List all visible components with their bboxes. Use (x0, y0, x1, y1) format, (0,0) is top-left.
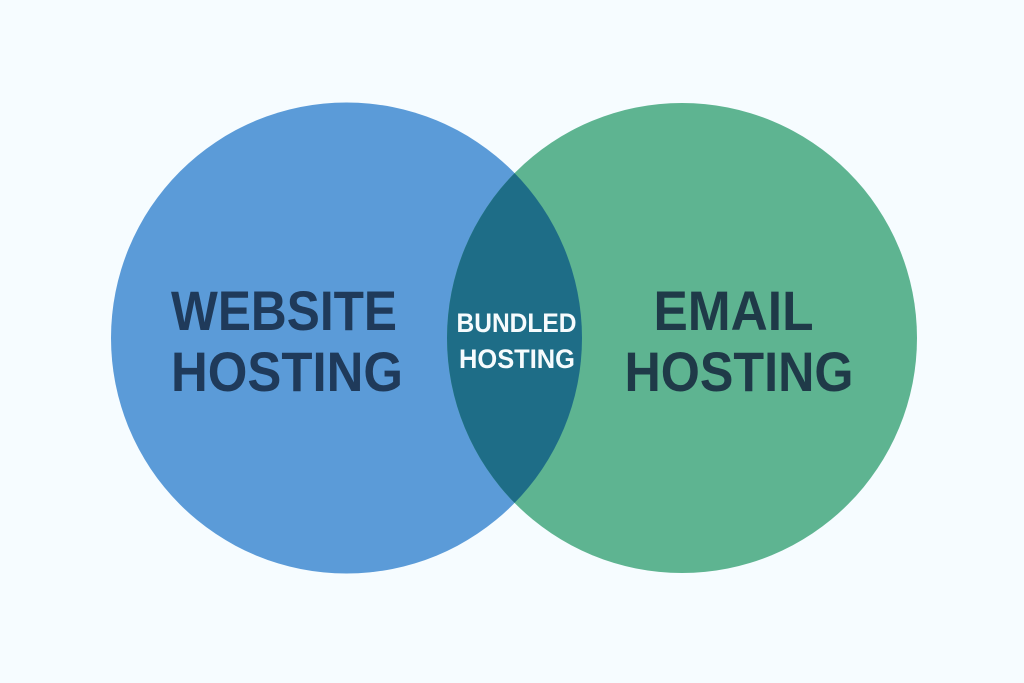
label: bundled hosting: HOSTING (459, 344, 575, 374)
circle: email hosting (447, 103, 917, 573)
label: email hosting: HOSTING (624, 340, 854, 403)
label: bundled hosting (456, 308, 576, 374)
label: website hosting: WEBSITE (171, 279, 397, 342)
label: website hosting (171, 279, 403, 403)
venn diagram (111, 102, 917, 574)
label: website hosting: HOSTING (171, 340, 403, 403)
circle: website hosting (111, 102, 582, 574)
label: email hosting: EMAIL (654, 279, 814, 342)
overlap: bundled hosting (447, 173, 582, 503)
label: bundled hosting: BUNDLED (456, 308, 576, 338)
label: email hosting (624, 279, 854, 403)
